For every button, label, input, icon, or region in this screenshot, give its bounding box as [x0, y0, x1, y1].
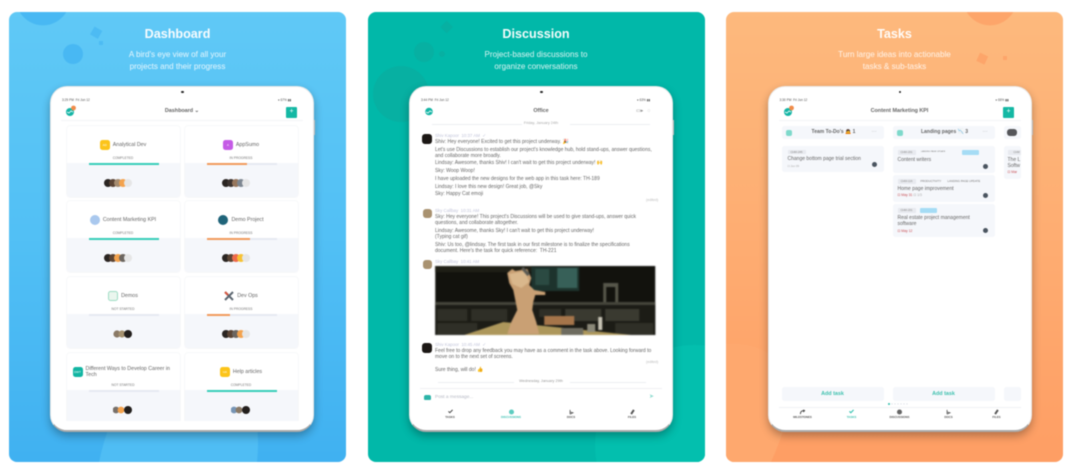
text: dashboard subtitle: projects and their progress [130, 62, 225, 70]
task: Home page improvement: Home page improvement [898, 186, 954, 192]
nav: docs [566, 409, 576, 419]
panel: tasks [726, 12, 1063, 462]
task: partially visible third column: Softw [1008, 163, 1020, 169]
message: Shiv Kapoor [421, 133, 658, 202]
nav: discussions [889, 408, 910, 419]
task: Home page improvement: ⊡ May 31 ⊡ 1/3 [898, 193, 922, 197]
add task: column one [782, 387, 884, 401]
nav divider [778, 406, 1020, 408]
nav: docs: DOCS [944, 415, 953, 419]
nav: files [992, 409, 1001, 419]
card: Demos: Demos [121, 293, 138, 299]
page dots [887, 402, 908, 406]
message: Sky Callbay: questions, and collaborate altogether. [435, 220, 518, 226]
nav: tasks active [846, 409, 857, 419]
message: Sky Callbay: Sky: Hey everyone! This project's Discussions will be used to give stand-ups, answer quick [435, 214, 636, 220]
nav: docs: DOCS [567, 414, 575, 418]
task: Change bottom page trial section: CHM-245 [791, 150, 802, 154]
task: Home page improvement: PRODUCTIVITY [920, 179, 941, 183]
message: Sky Callbay: Sky Callbay 10:31 AM [435, 208, 479, 212]
tablet side buttons [672, 119, 675, 136]
column header: Landing pages [892, 126, 994, 139]
nav: files [627, 409, 636, 418]
card: Dev Ops: IN PROGRESS [230, 307, 252, 311]
tablet side buttons [1032, 120, 1034, 136]
status bar battery: ▾ 67% ▮▮ [278, 98, 291, 102]
add task: column three [1004, 387, 1020, 401]
status bar time: 3:30 PM Fri Jun 12 [780, 98, 807, 102]
status bar time: 3:44 PM Fri Jun 12 [421, 98, 449, 102]
card: Analytical Dev: Analytical Dev [113, 142, 146, 148]
message: Sky Callbay: Shiv: Us too, @lindsay. The first task in our first milestone is to finalize the specifications [435, 242, 630, 248]
column header: third column [1004, 126, 1020, 139]
nav: files: FILES [628, 414, 636, 418]
message input: ➤ [649, 394, 654, 400]
message input [420, 388, 662, 407]
message: Shiv feedback: move on to the next set of screens. [435, 354, 513, 360]
message: Shiv feedback: (edited) [646, 360, 658, 364]
add task: column two [892, 387, 994, 401]
task: Change bottom page trial section: Change bottom page trial section [788, 156, 861, 162]
card: AppSumo: A [227, 143, 229, 147]
message: Shiv Kapoor: Lindsay: Awesome, thanks Shiv! I can't wait to get this project underway! 🙌 [435, 160, 603, 166]
task: Change bottom page trial section: ⊡ Jun 09 [788, 164, 799, 168]
add button [1003, 106, 1014, 118]
card: Analytical Dev [66, 126, 180, 196]
message: Shiv feedback [421, 342, 658, 373]
column header: Landing pages: Landing pages 📉 3 [921, 129, 968, 135]
header icons: ▭▸ ◌ [636, 108, 650, 114]
nav: discussions: DISCUSSIONS [890, 415, 909, 419]
message: Shiv Kapoor: and collaborate more broadly. [435, 152, 501, 158]
task: Content writers: LANDING PAGE UPDATE [921, 151, 945, 153]
heading: tasks: Tasks [877, 27, 912, 41]
task: Real estate project management software: Real estate project management [898, 215, 970, 221]
text: tasks subtitle: Turn large ideas into actionable [838, 50, 951, 59]
message: Shiv feedback: Feel free to drop any feedback you may have as a comment in the task above. Looking forward to [435, 348, 651, 354]
panel: discussion [368, 12, 704, 462]
task: partially visible third column: ⊡ Mar [1008, 170, 1017, 174]
card: Help articles: Help articles [233, 369, 262, 375]
column header: Team To-Do's: Team To-Do's 🙇 1 [812, 129, 855, 135]
screen title: Dashboard ⌄ [165, 108, 199, 114]
card: Content Marketing KPI [66, 201, 180, 272]
tablet: dashboard screen [50, 86, 314, 432]
task: Content writers [892, 146, 994, 172]
message: cat gif [422, 259, 657, 336]
card: Dev Ops: Dev Ops [237, 293, 258, 299]
task: partially visible third column: The L [1008, 157, 1020, 163]
task: Home page improvement: LANDING PAGE UPDATE [948, 179, 980, 183]
message: Shiv Kapoor: Sky: Woop Woop! [435, 168, 475, 174]
card: Dev Ops [184, 277, 298, 348]
text: discussion subtitle [484, 50, 588, 72]
app logo [783, 104, 795, 117]
nav: discussions: DISCUSSIONS [501, 414, 521, 418]
card: AppSumo: IN PROGRESS [230, 156, 252, 160]
task: Real estate project management software: ⊡ May 12 [898, 228, 912, 232]
date divider: Wednesday: Wednesday, January 29th [519, 379, 563, 383]
task: Real estate project management software: CHM-201 [901, 208, 912, 212]
message: Sky Callbay: document. Here's the task for quick reference: TH-221 [435, 248, 556, 254]
task: Content writers: Content writers [898, 157, 931, 163]
card: Different Ways to Develop Career in Tech: NOT STARTED [112, 383, 134, 387]
text: discussion subtitle: organize conversations [494, 62, 578, 70]
camera dot [540, 90, 543, 93]
card: AppSumo [184, 126, 298, 196]
add button: + [289, 108, 294, 114]
nav: milestones [792, 409, 812, 419]
task: Change bottom page trial section [782, 146, 884, 172]
card: Demos: NOT STARTED [112, 307, 134, 311]
card: Content Marketing KPI: Content Marketing KPI [103, 217, 156, 223]
image: dancing cat [434, 264, 657, 336]
message: Shiv feedback: Sure thing, will do! 👍 [435, 366, 483, 372]
status bar battery: ▾ 63% ▮▮ [637, 98, 650, 102]
nav: milestones: MILESTONES [793, 415, 812, 419]
decorative circles: discussion background [698, 455, 706, 462]
nav: tasks: TASKS [445, 414, 455, 418]
message: Shiv Kapoor: I have uploaded the new designs for the web app in this task here: TH-189 [435, 176, 600, 182]
heading: discussion: Discussion [502, 27, 570, 41]
card: Help articles [184, 353, 298, 424]
nav: discussions [500, 408, 522, 419]
add task: column two: Add task [932, 391, 955, 397]
message: cat gif: Sky Callbay 10:41 AM [435, 259, 479, 264]
panel: dashboard [9, 12, 346, 462]
card: Demo Project: Demo Project [231, 217, 264, 223]
card: AppSumo: AppSumo [236, 142, 259, 148]
channel title: Office [533, 108, 549, 114]
message: Shiv Kapoor: Lindsay: I love this new design! Great job, @Sky [435, 184, 542, 190]
message: Shiv Kapoor: Shiv: Hey everyone! Excited to get this project underway. 🎉 [435, 139, 569, 145]
task: Content writers: CHM-201 [901, 150, 912, 154]
status bar battery: ▾ 66% ▮▮ [996, 98, 1009, 102]
decorative circles: tasks background [726, 12, 1013, 462]
card: Analytical Dev: AD [103, 143, 107, 147]
nav: docs [944, 409, 954, 419]
heading: dashboard: Dashboard [145, 27, 210, 41]
message: Shiv Kapoor: Shiv Kapoor 10:37 AM ✓ [435, 133, 486, 138]
column header: Landing pages: ··· [982, 129, 988, 135]
column header: Team To-Do's: ··· [872, 129, 876, 135]
add button [286, 106, 297, 118]
message: Shiv Kapoor: Let's use Discussions to establish our project's knowledge hub, hold stand-ups, answer questions, [435, 146, 652, 152]
date divider: Friday: Friday, January 24th [524, 120, 558, 124]
text: dashboard subtitle [128, 50, 226, 72]
card: Different Ways to Develop Career in Tech [66, 353, 180, 424]
message: Shiv Kapoor: (edited) [646, 198, 658, 202]
text: discussion subtitle: Project-based discussions to [484, 50, 588, 59]
add button: + [1006, 108, 1011, 114]
header divider [778, 120, 1020, 121]
card: Analytical Dev: COMPLETED [113, 156, 133, 160]
card: Demo Project: IN PROGRESS [230, 231, 252, 235]
tablet side buttons [313, 120, 316, 136]
task: partially visible third column [1004, 146, 1020, 179]
app logo [424, 107, 434, 116]
nav: tasks active: TASKS [847, 415, 856, 419]
bottom white strip [51, 421, 312, 430]
camera dot [181, 90, 184, 93]
task: Real estate project management software: software [898, 221, 916, 227]
screen title: Content Marketing KPI [871, 108, 928, 114]
card: Different Ways to Develop Career in Tech: Different Ways to Develop Career in Tech [86, 366, 170, 378]
message: Shiv Kapoor: Sky: Happy Cat emoji [435, 191, 483, 197]
camera dot [898, 90, 901, 93]
task: Home page improvement: CHM-116 [901, 179, 912, 183]
text: tasks subtitle: tasks & sub-tasks [863, 62, 926, 70]
message: Sky Callbay: Lindsay: Awesome, thanks Sky! I can't wait to get this project underway! [435, 228, 594, 234]
message: Shiv feedback: Shiv Kapoor 10:45 AM ✓ [435, 342, 486, 346]
message: Sky Callbay [422, 208, 636, 254]
card: Different Ways to Develop Career in Tech: DWT [74, 370, 81, 374]
task: Real estate project management software [892, 204, 994, 237]
tablet: tasks screen [768, 86, 1032, 432]
message input: Post a message... [435, 394, 473, 400]
card: Content Marketing KPI: COMPLETED [113, 231, 133, 235]
task: partially visible third column: CHM [1013, 150, 1020, 154]
status bar time: 3:29 PM Fri Jun 12 [62, 98, 90, 102]
card: Help articles: HA [223, 370, 227, 374]
column header: Team To-Do's [782, 126, 884, 139]
tablet: discussion screen [409, 86, 673, 432]
card: Demos [66, 277, 180, 348]
decorative circles: dashboard background [20, 12, 258, 462]
text: tasks subtitle [838, 50, 951, 70]
app logo [65, 104, 77, 117]
text: dashboard subtitle: A bird's eye view of all your [129, 50, 226, 59]
nav: tasks [444, 409, 456, 419]
add task: column one: Add task [821, 391, 844, 397]
card: Demo Project [184, 201, 298, 272]
card: Help articles: COMPLETED [231, 383, 251, 387]
task: Home page improvement [892, 175, 994, 202]
header divider [61, 120, 303, 121]
message: Sky Callbay: (Typing cat gif) [435, 234, 468, 240]
nav: files: FILES [992, 415, 1001, 419]
